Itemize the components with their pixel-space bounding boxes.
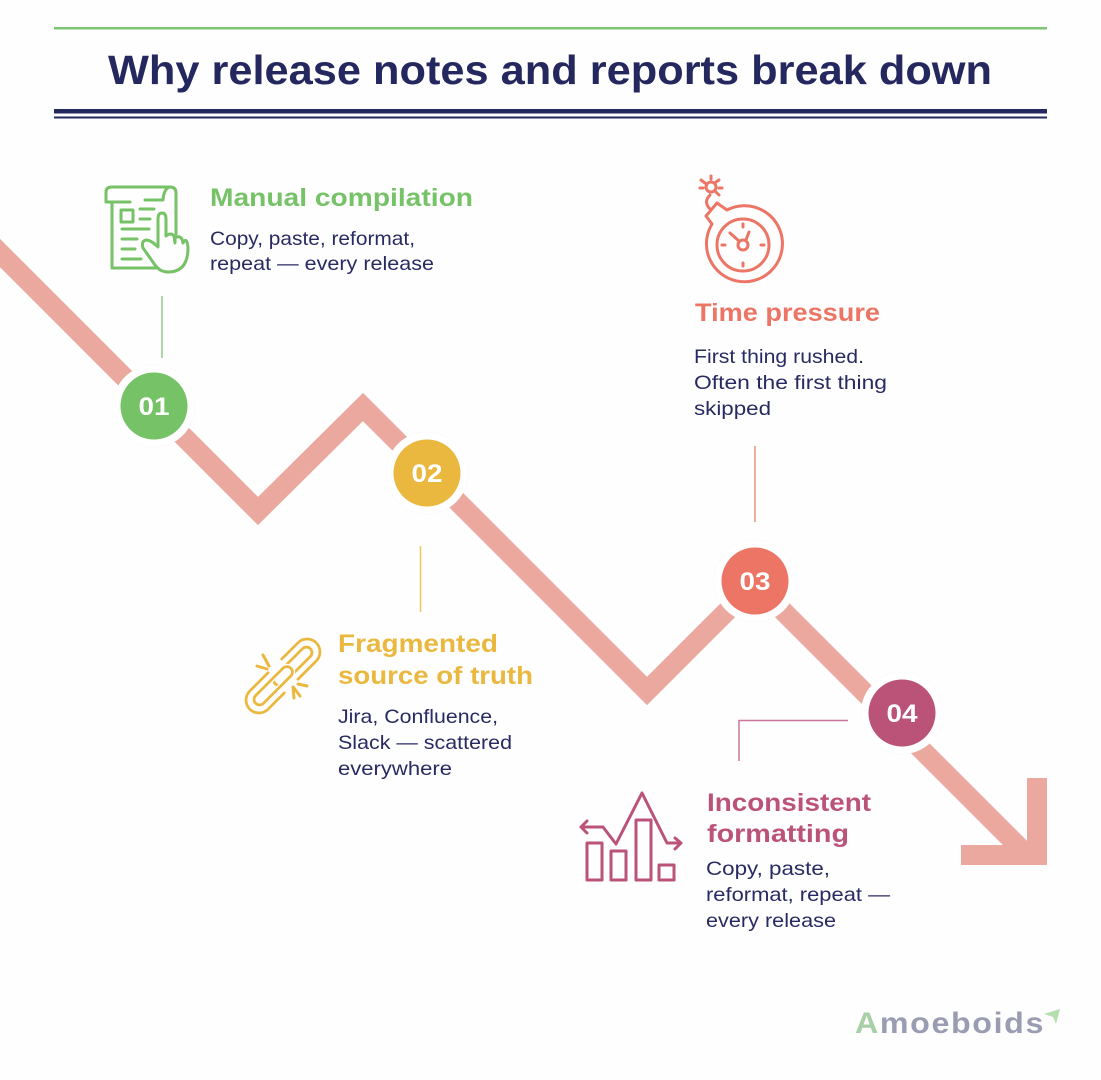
heading 03: Time pressure bbox=[695, 299, 880, 327]
step 04 marker bbox=[861, 672, 943, 754]
logo: Amoeboids bbox=[855, 1007, 1045, 1040]
icon: stopwatch bomb bbox=[700, 176, 782, 282]
text 03: Often the first thing bbox=[694, 372, 887, 394]
step 04 marker: 04 bbox=[886, 700, 918, 728]
connector 04 bbox=[739, 720, 848, 761]
icon: document with pointing hand bbox=[106, 187, 188, 272]
heading 01: Manual compilation bbox=[210, 184, 473, 212]
step 01 marker bbox=[113, 365, 195, 447]
icon: bar chart with trend arrows bbox=[581, 793, 681, 880]
step 02 marker: 02 bbox=[412, 460, 442, 488]
text 04: every release bbox=[706, 910, 836, 932]
text 02: Slack — scattered bbox=[338, 732, 512, 754]
title: Why release notes and reports break down bbox=[108, 47, 992, 93]
text 01: Copy, paste, reformat, bbox=[210, 228, 415, 250]
text 03: First thing rushed. bbox=[694, 346, 864, 368]
heading 04: formatting bbox=[707, 820, 849, 848]
heading 04: Inconsistent bbox=[707, 789, 872, 817]
step 01 marker: 01 bbox=[138, 393, 170, 421]
text 01: repeat — every release bbox=[210, 253, 434, 275]
step 02 marker bbox=[386, 432, 468, 514]
text 03: skipped bbox=[694, 398, 771, 420]
heading 02: Fragmented bbox=[338, 630, 498, 658]
text 04: Copy, paste, bbox=[706, 858, 830, 880]
step 03 marker: 03 bbox=[740, 568, 770, 596]
descending zigzag arrow bbox=[0, 241, 1037, 858]
icon: broken chain bbox=[241, 634, 325, 718]
heading 02: source of truth bbox=[338, 662, 533, 690]
text 02: Jira, Confluence, bbox=[338, 706, 498, 728]
text 02: everywhere bbox=[338, 758, 452, 780]
text 04: reformat, repeat — bbox=[706, 884, 891, 906]
step 03 marker bbox=[714, 540, 796, 622]
connector 03 bbox=[754, 446, 756, 522]
connector 02 bbox=[420, 546, 422, 612]
connector 01 bbox=[161, 296, 163, 358]
